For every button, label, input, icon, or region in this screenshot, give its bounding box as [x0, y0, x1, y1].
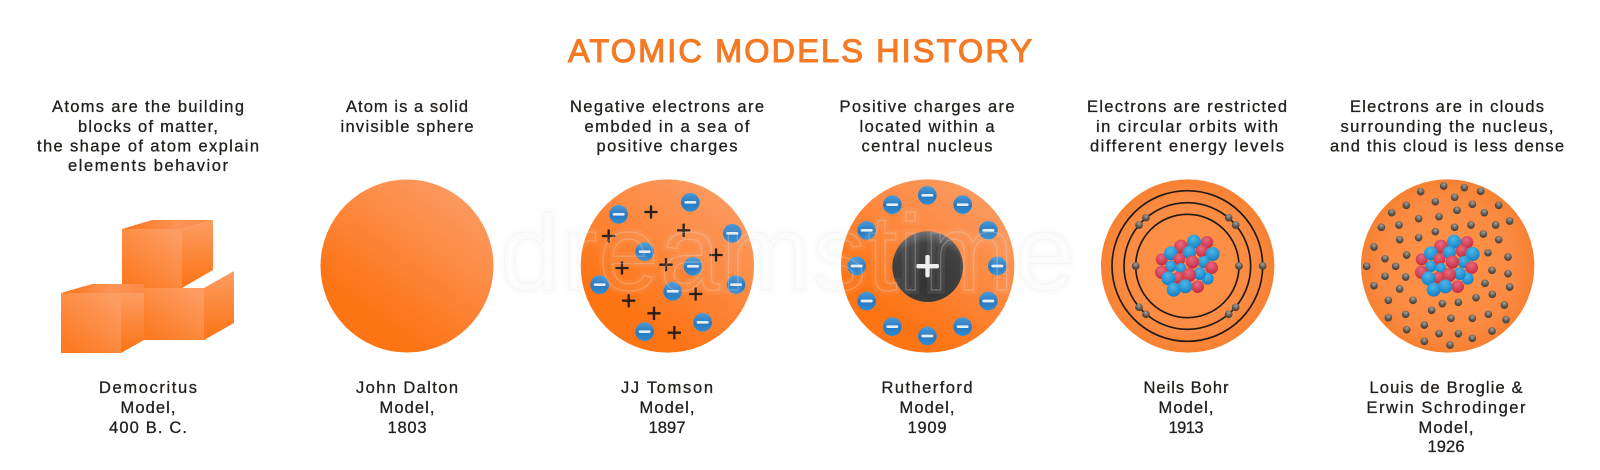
- description: Rutherford: Positive charges are: [840, 98, 1014, 116]
- caption: Bohr: 1913: [1168, 419, 1204, 437]
- title: ATOMIC MODELS HISTORY: [568, 33, 1032, 69]
- caption: Thomson: 1897: [648, 419, 686, 437]
- icon: stacked cubes: [61, 220, 234, 353]
- caption: de Broglie and Schrodinger: Erwin Schrodinger: [1366, 399, 1526, 417]
- caption: Democritus: Democritus: [99, 379, 197, 397]
- caption: Thomson: JJ Tomson: [621, 379, 713, 397]
- description: Democritus: Atoms are the building: [52, 98, 244, 116]
- caption: Bohr: Neils Bohr: [1144, 379, 1229, 397]
- caption: de Broglie and Schrodinger: 1926: [1428, 438, 1464, 456]
- description: Rutherford: central nucleus: [862, 138, 992, 156]
- description: Democritus: the shape of atom explain: [37, 138, 259, 156]
- panel: de Broglie and Schrodinger model: [1330, 98, 1564, 456]
- caption: Bohr: Model,: [1158, 399, 1214, 417]
- diagram: electron cloud atom: [1361, 179, 1534, 353]
- caption: Dalton: 1803: [388, 419, 426, 437]
- caption: Dalton: John Dalton: [356, 379, 458, 397]
- description: Democritus: blocks of matter,: [78, 118, 218, 136]
- description: Rutherford: [840, 98, 1014, 156]
- description: Bohr: different energy levels: [1090, 138, 1284, 156]
- description: Bohr: Electrons are restricted: [1087, 98, 1287, 116]
- watermark: dreamstime: [500, 192, 1075, 313]
- caption: Democritus: 400 B. C.: [109, 419, 187, 437]
- diagram: nuclear atom: [841, 179, 1014, 353]
- panel: Rutherford model: [840, 98, 1014, 437]
- description: electron cloud: and this cloud is less dense: [1330, 138, 1564, 156]
- caption: Dalton: [356, 379, 458, 437]
- caption: Thomson: [621, 379, 713, 437]
- caption: Rutherford: Rutherford: [882, 379, 972, 397]
- description: Dalton: [340, 98, 474, 136]
- diagram: plum pudding atom: [581, 179, 754, 353]
- watermark: dreamstime: [500, 192, 1075, 313]
- caption: Democritus: Model,: [120, 399, 176, 417]
- panel: Bohr model: [1087, 98, 1287, 437]
- description: electron cloud: [1330, 98, 1564, 156]
- description: Dalton: invisible sphere: [340, 118, 474, 136]
- caption: Dalton: Model,: [380, 399, 434, 417]
- caption: Bohr: [1144, 379, 1229, 437]
- description: Bohr: [1087, 98, 1287, 156]
- description: Thomson: embded in a sea of: [584, 118, 750, 136]
- description: Thomson: Negative electrons are: [570, 98, 764, 116]
- description: Thomson: [570, 98, 764, 156]
- caption: de Broglie and Schrodinger: Model,: [1418, 419, 1474, 437]
- caption: de Broglie and Schrodinger: Louis de Broglie &: [1370, 379, 1522, 397]
- diagram: orbit atom: [1101, 179, 1274, 353]
- description: Thomson: positive charges: [596, 138, 738, 156]
- caption: Rutherford: Model,: [900, 399, 954, 417]
- panel: Democritus model: [37, 98, 259, 437]
- icon: solid sphere: [320, 180, 494, 352]
- caption: Rutherford: 1909: [908, 419, 946, 437]
- caption: Rutherford: [882, 379, 972, 437]
- caption: Democritus: [99, 379, 197, 437]
- description: electron cloud: Electrons are in clouds: [1350, 98, 1544, 116]
- description: Rutherford: located within a: [860, 118, 995, 136]
- description: Bohr: in circular orbits with: [1096, 118, 1278, 136]
- caption: Thomson: Model,: [640, 399, 694, 417]
- panel: Thomson model: [570, 98, 764, 437]
- caption: de Broglie and Schrodinger: [1366, 379, 1526, 456]
- description: electron cloud: surrounding the nucleus,: [1340, 118, 1554, 136]
- description: Democritus: [37, 98, 259, 175]
- description: Dalton: Atom is a solid: [346, 98, 468, 116]
- description: Democritus: elements behavior: [68, 157, 228, 175]
- panel: Dalton model: [320, 98, 494, 437]
